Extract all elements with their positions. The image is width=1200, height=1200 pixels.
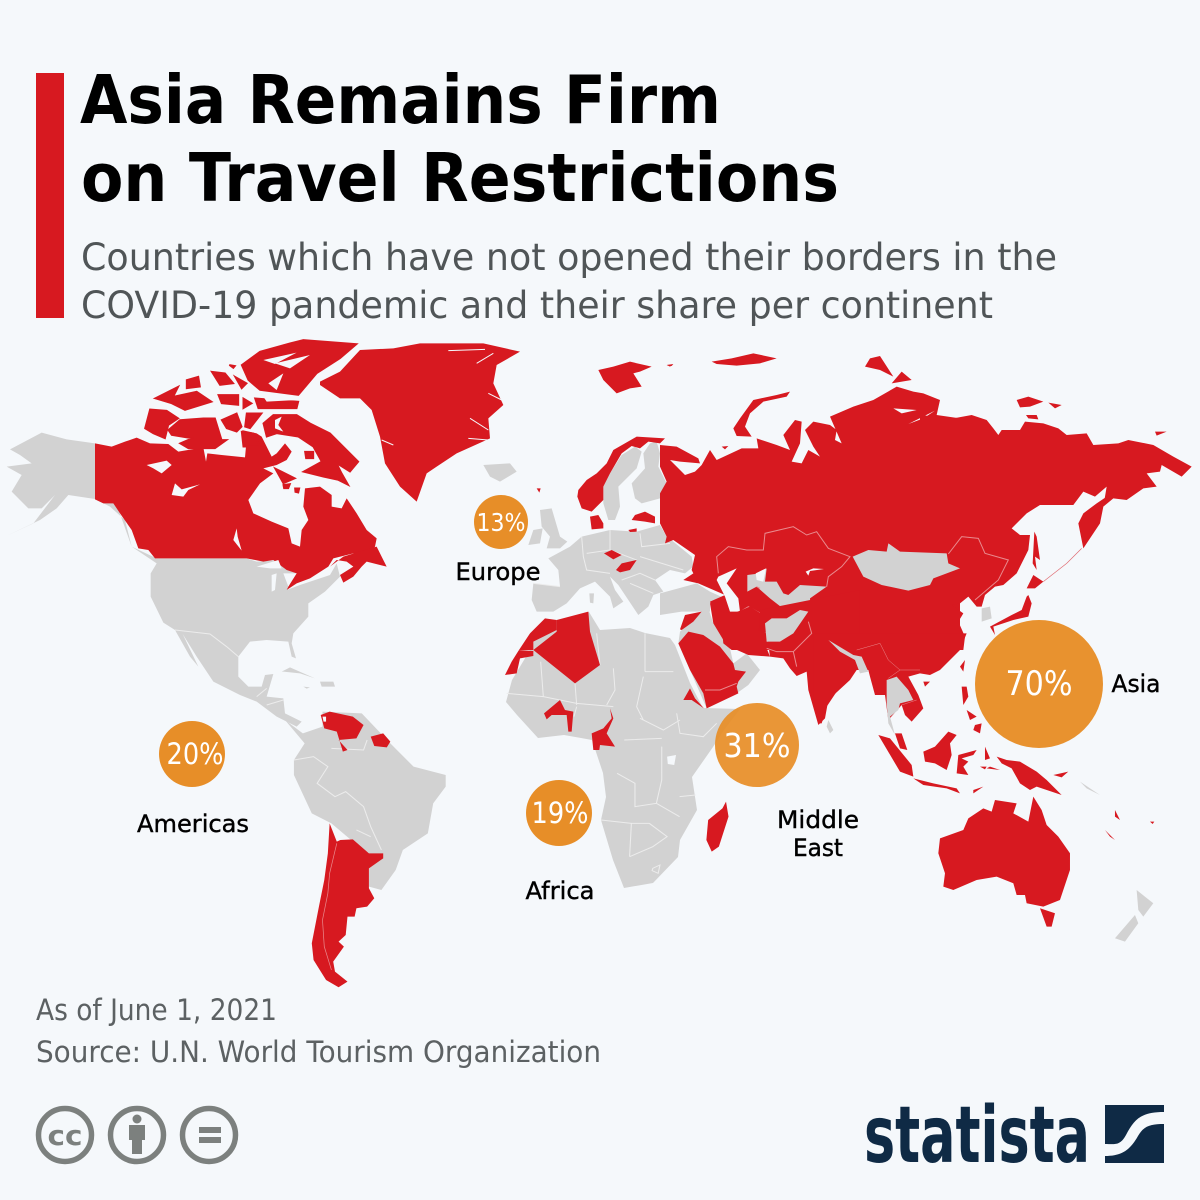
- red countries of the Middle East, North Africa and South Asia: [505, 590, 860, 750]
- Southeast Asia and Oceania: [813, 633, 1154, 942]
- Russia, Central Asia, west China: [660, 353, 960, 650]
- bubble: Americas 20%: 20%: [166, 737, 224, 771]
- logo: statista icon: [1105, 1105, 1164, 1163]
- accent bar: [36, 73, 64, 318]
- title: on Travel Restrictions: [81, 139, 839, 217]
- bubble: Americas 20%: [159, 721, 225, 787]
- South America and southern Africa: [285, 712, 729, 987]
- Middle East in grey: [507, 603, 760, 737]
- title: [80, 61, 839, 217]
- subtitle: [81, 236, 1057, 327]
- bubble: Asia 70%: 70%: [1006, 664, 1072, 704]
- Far East Russia, Manchuria, Japan: [853, 397, 1192, 650]
- bubble: Middle East 31%: 31%: [724, 726, 790, 765]
- Greenland in red: [320, 343, 520, 502]
- icon: attribution: [110, 1108, 164, 1162]
- icon: creative commons: cc: [48, 1119, 82, 1152]
- Europe: [483, 362, 693, 615]
- Africa in grey: [506, 612, 740, 888]
- grey overlays over South Asia: [705, 610, 853, 733]
- label: Europe: Europe: [456, 558, 540, 586]
- subtitle: COVID-19 pandemic and their share per continent: [81, 284, 993, 327]
- bubble: Europe 13%: 13%: [476, 508, 526, 537]
- label: Asia: Asia: [1112, 670, 1160, 698]
- title: Asia Remains Firm: [80, 61, 721, 139]
- bubble: Middle East 31%: [715, 703, 799, 787]
- label: Middle East: Middle: [777, 806, 859, 834]
- label: Middle East: East: [793, 834, 843, 862]
- bubble: Africa 19%: [526, 780, 592, 846]
- label: Middle East: [777, 806, 859, 862]
- bubble: Asia 70%: [975, 620, 1103, 748]
- icon: creative commons: [38, 1108, 92, 1162]
- Great Lakes: [257, 560, 297, 592]
- source note: As of June 1, 2021: [36, 993, 277, 1027]
- subtitle: Countries which have not opened their borders in the: [81, 236, 1057, 279]
- label: Africa: Africa: [526, 877, 594, 905]
- bubble: Africa 19%: 19%: [532, 796, 588, 830]
- Canada in red: [95, 340, 387, 590]
- North America grey: Alaska, USA, Mexico, Central America: [5, 433, 340, 727]
- label: Americas: Americas: [137, 810, 249, 838]
- world map: [5, 340, 1192, 987]
- source note: Source: U.N. World Tourism Organization: [36, 1035, 601, 1069]
- source note: [36, 993, 601, 1069]
- logo: statista wordmark: statista: [864, 1091, 1090, 1181]
- icon: no derivatives: [182, 1108, 236, 1162]
- bubble: Europe 13%: [474, 495, 528, 549]
